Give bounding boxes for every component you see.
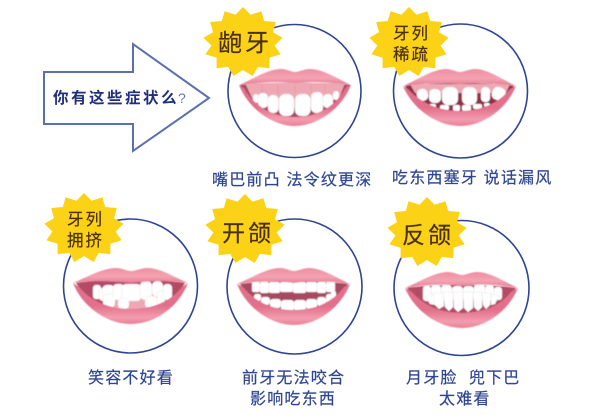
mouth illustration xyxy=(239,69,351,126)
panel: protruding teeth xyxy=(203,7,372,189)
caption: 太难看 xyxy=(439,390,491,408)
caption: 月牙脸 兜下巴 xyxy=(406,369,520,387)
caption: 嘴巴前凸 法令纹更深 xyxy=(212,171,372,189)
badge title: 开颌 xyxy=(222,220,274,246)
mouth illustration xyxy=(73,268,188,324)
panel: gapped teeth xyxy=(369,7,552,187)
badge title: 龅牙 xyxy=(218,30,272,57)
starburst badge xyxy=(205,194,285,263)
circle frame xyxy=(394,220,529,356)
circle frame xyxy=(394,24,528,158)
badge title: 牙列 xyxy=(393,24,430,43)
mouth illustration xyxy=(403,69,516,126)
circle frame xyxy=(227,219,362,354)
badge title: 牙列 xyxy=(67,210,104,229)
starburst badge xyxy=(387,197,467,266)
caption: 影响吃东西 xyxy=(250,390,336,408)
starburst badge xyxy=(44,193,124,262)
panel: open bite xyxy=(205,194,362,408)
badge title: 反颌 xyxy=(402,222,454,248)
arrow: question callout xyxy=(44,44,209,151)
caption: 笑容不好看 xyxy=(88,369,174,387)
panel: crowded teeth xyxy=(44,193,198,387)
circle frame xyxy=(64,219,198,353)
mouth illustration xyxy=(405,272,518,328)
caption: 前牙无法咬合 xyxy=(242,369,345,387)
question text: 你有这些症状么? xyxy=(53,88,186,107)
badge title: 拥挤 xyxy=(67,231,104,250)
starburst badge xyxy=(369,7,449,76)
starburst badge xyxy=(203,7,283,76)
mouth illustration xyxy=(237,268,350,325)
badge title: 稀疏 xyxy=(393,45,430,64)
panel: underbite xyxy=(387,197,529,408)
circle frame xyxy=(228,24,361,158)
caption: 吃东西塞牙 说话漏风 xyxy=(392,169,552,187)
